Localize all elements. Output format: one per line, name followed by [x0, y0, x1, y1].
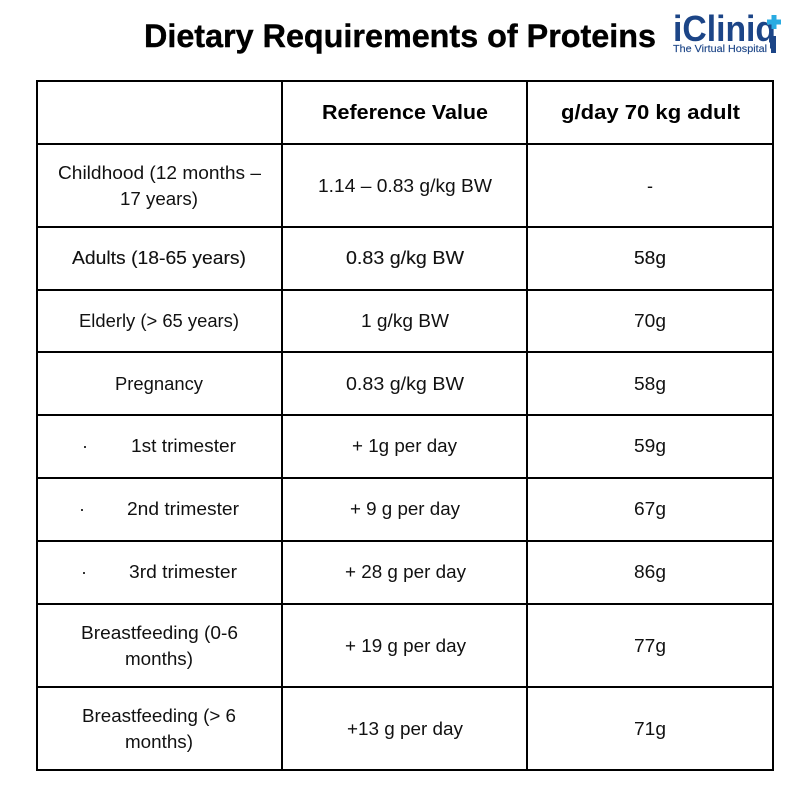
row: elderly: Elderly (> 65 years): [79, 311, 239, 331]
title: Dietary Requirements of Proteins: [144, 18, 656, 54]
row: 1st trimester: ·: [82, 436, 88, 456]
row: pregnancy: 0.83 g/kg BW: [346, 374, 464, 394]
row: 2nd trimester: + 9 g per day: [350, 499, 460, 519]
row: childhood: 1.14 – 0.83 g/kg BW: [318, 176, 492, 196]
row: 2nd trimester: 2nd trimester: [127, 499, 239, 519]
row: 1st trimester: + 1g per day: [352, 436, 457, 456]
row: elderly: 1 g/kg BW: [361, 311, 449, 331]
table grid: [37, 81, 773, 770]
row: breastfeeding 0-6 months: + 19 g per day: [345, 636, 466, 656]
row: pregnancy: [115, 374, 666, 394]
row: 3rd trimester: [81, 562, 666, 582]
row: 2nd trimester: ·: [79, 499, 85, 519]
icon: iCliniq logo: iCliniq: [673, 8, 776, 49]
row: adults: [72, 248, 666, 268]
row: adults: 0.83 g/kg BW: [346, 248, 464, 268]
table header: Reference Value: [322, 102, 488, 124]
row: adults: Adults (18-65 years): [72, 248, 246, 268]
row: elderly: [79, 311, 666, 331]
row: breastfeeding over 6 months: +13 g per day: [347, 719, 463, 739]
row: childhood: [58, 163, 653, 209]
row: breastfeeding over 6 months: months): [125, 732, 193, 752]
row: breastfeeding 0-6 months: [81, 623, 666, 669]
row: 3rd trimester: + 28 g per day: [345, 562, 466, 582]
row: 2nd trimester: 67g: [634, 499, 666, 519]
row: 1st trimester: 59g: [634, 436, 666, 456]
row: childhood: Childhood (12 months –: [58, 163, 261, 183]
row: 3rd trimester: ·: [81, 562, 87, 582]
row: breastfeeding over 6 months: 71g: [634, 719, 666, 739]
row: breastfeeding over 6 months: [82, 706, 666, 752]
row: 2nd trimester: [79, 499, 666, 519]
row: 3rd trimester: 86g: [634, 562, 666, 582]
row: pregnancy: Pregnancy: [115, 374, 203, 394]
row: elderly: 70g: [634, 311, 666, 331]
row: breastfeeding 0-6 months: 77g: [634, 636, 666, 656]
row: 3rd trimester: 3rd trimester: [129, 562, 237, 582]
row: breastfeeding over 6 months: Breastfeeding (> 6: [82, 706, 236, 726]
icon: iCliniq logo: The Virtual Hospital: [673, 43, 767, 55]
row: breastfeeding 0-6 months: Breastfeeding (0-6: [81, 623, 238, 643]
table header: g/day 70 kg adult: [561, 102, 740, 124]
row: breastfeeding 0-6 months: months): [125, 649, 193, 669]
row: childhood: -: [647, 176, 653, 196]
row: 1st trimester: [82, 436, 666, 456]
table header: [322, 102, 740, 124]
row: adults: 58g: [634, 248, 666, 268]
row: childhood: 17 years): [120, 189, 198, 209]
row: pregnancy: 58g: [634, 374, 666, 394]
row: 1st trimester: 1st trimester: [131, 436, 236, 456]
